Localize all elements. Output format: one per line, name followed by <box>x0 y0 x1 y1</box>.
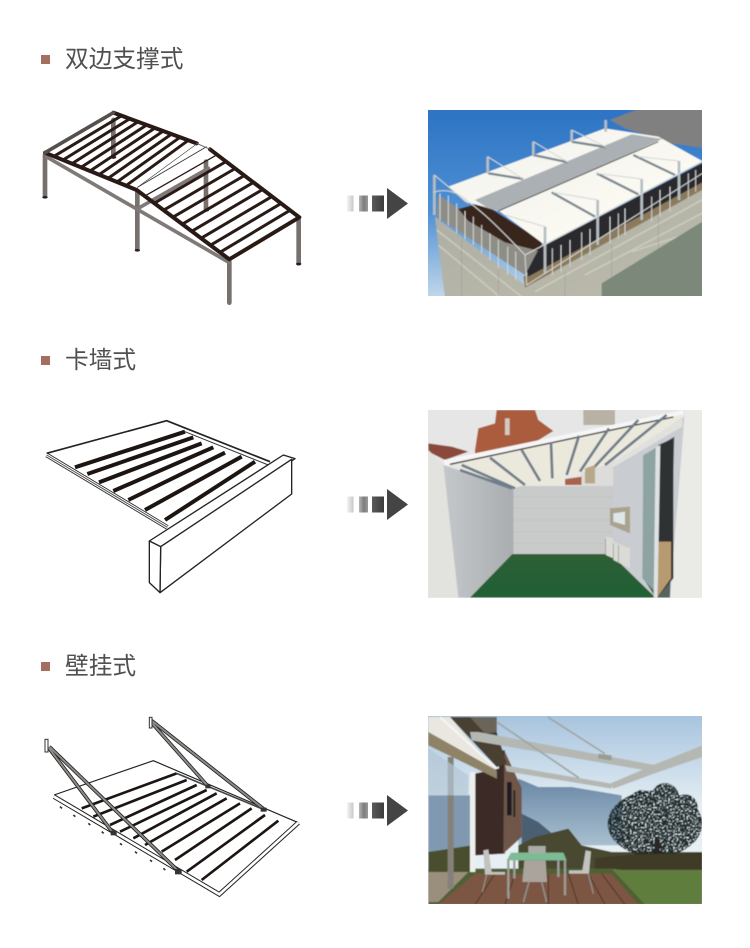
photo: rooftop installation <box>428 110 702 296</box>
canopy outline <box>54 761 298 823</box>
heading: 双边支撑式: 双边支撑式 <box>65 47 183 73</box>
heading: 卡墙式: 卡墙式 <box>65 348 136 374</box>
photo: walled courtyard installation <box>428 410 702 598</box>
lower beams <box>47 157 228 262</box>
arrow 1 <box>347 188 408 219</box>
brackets <box>45 717 152 752</box>
front rail <box>47 432 268 527</box>
photo: terrace with mountain view <box>428 716 702 904</box>
arrow 2 <box>347 489 408 520</box>
table and chairs <box>507 853 567 860</box>
rafters right section <box>137 147 290 252</box>
arms <box>470 732 702 789</box>
support arms <box>48 721 265 872</box>
tree <box>608 783 702 857</box>
legs <box>45 120 299 303</box>
slats <box>82 773 278 880</box>
diagram: double-side supported frame <box>42 110 302 305</box>
diagram: wall-clamped frame <box>46 420 296 594</box>
heading: 壁挂式: 壁挂式 <box>65 654 136 680</box>
slats <box>75 432 255 520</box>
rafters left section <box>54 116 188 186</box>
diagram: wall-mounted frame <box>44 716 300 898</box>
front and side rails <box>54 797 298 894</box>
arrow 3 <box>347 795 408 826</box>
outer frame <box>45 113 299 259</box>
canopy outline <box>47 421 270 462</box>
wall <box>149 455 295 593</box>
